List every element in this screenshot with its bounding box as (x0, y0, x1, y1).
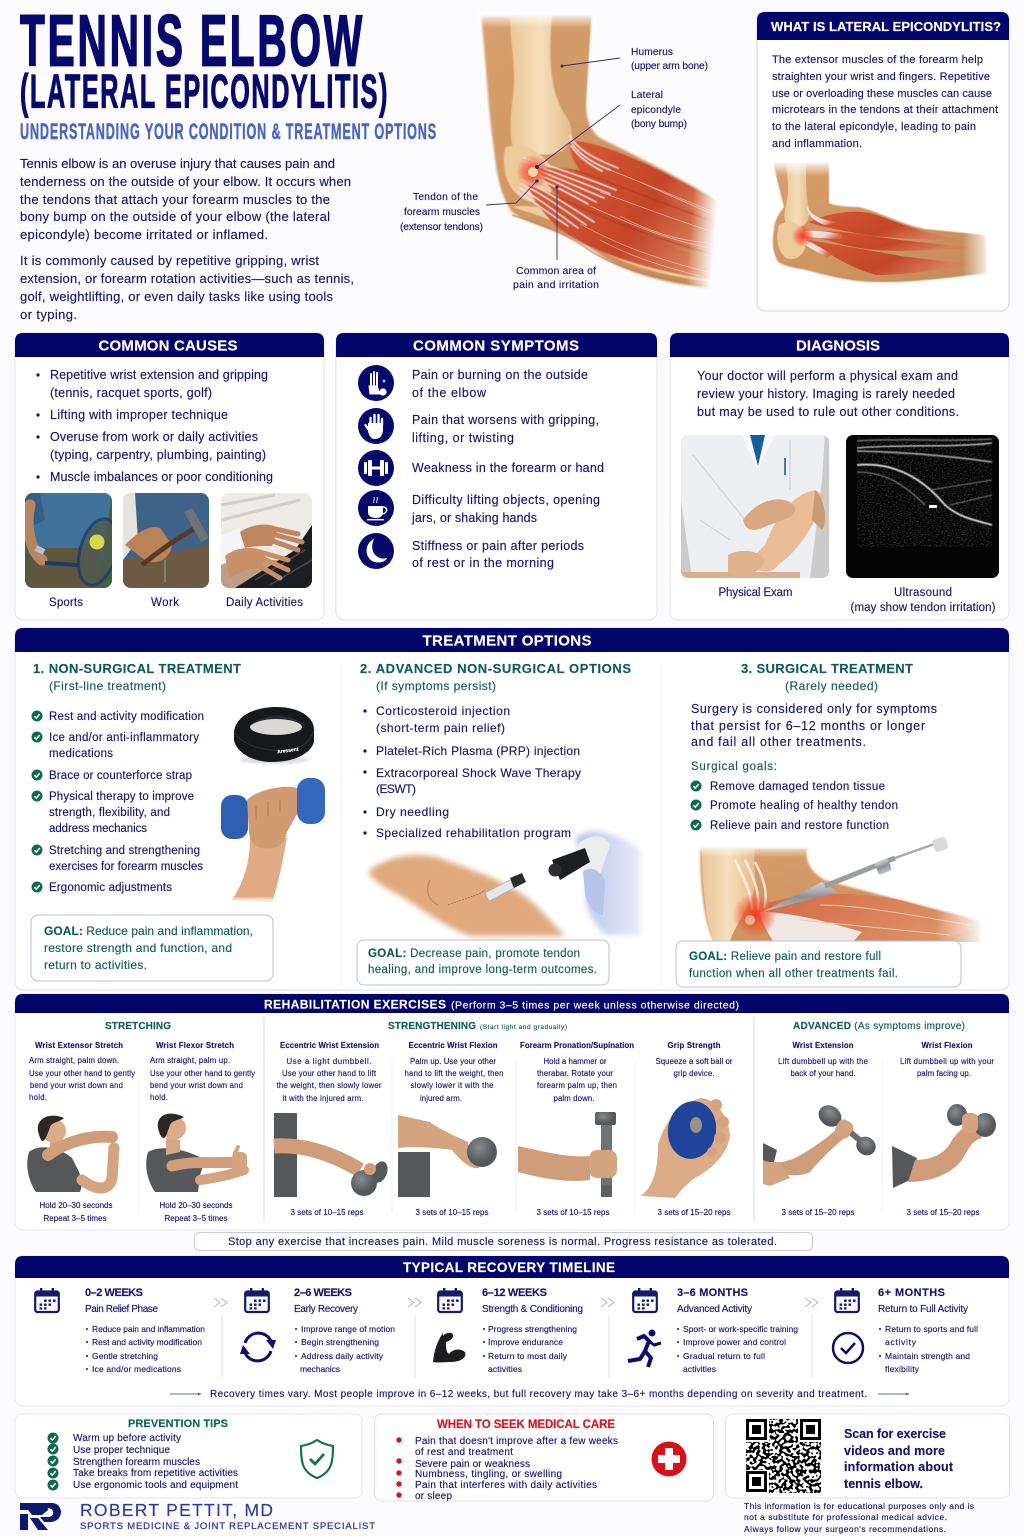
checklist: Stretching and strengthening (49, 845, 200, 857)
icon: flexed bicep (433, 1333, 465, 1362)
column: non-surgical treatment (31, 661, 325, 981)
exercise: wrist flexor stretch: Use your other hand to gently (150, 1069, 255, 1078)
intro paragraph 1: the tendons that attach your forearm muscles to the (20, 192, 330, 207)
exercise: eccentric wrist flexion (398, 1041, 504, 1217)
image: elbow brace (234, 707, 314, 764)
image: surgical elbow with instrument (695, 836, 985, 945)
exercise: eccentric wrist flexion: slowly lower it with the (410, 1081, 494, 1090)
exercise: eccentric wrist extension: it with the injured arm. (282, 1094, 364, 1103)
causes list: Lifting with improper technique (50, 408, 228, 422)
exercise: forearm pronation/supination: Hold a hammer or (544, 1057, 607, 1066)
options list: Platelet-Rich Plasma (PRP) injection (376, 744, 580, 758)
symptoms text (411, 368, 604, 570)
image: shock wave device (548, 831, 640, 935)
icon: calendar (835, 1288, 859, 1312)
image: elbow brace: Aressent (277, 747, 299, 755)
anatomy labels: Humerus (631, 47, 673, 58)
exercise: wrist flexor stretch: hold. (150, 1093, 168, 1102)
photo: work (123, 493, 209, 588)
causes list: Overuse from work or daily activities (50, 430, 258, 444)
phase: 3-6 months: 3–6 MONTHS (677, 1287, 748, 1299)
anatomy labels (400, 47, 708, 233)
QR caption: tennis elbow. (844, 1477, 923, 1491)
column heading: (If symptoms persist) (376, 679, 496, 693)
exercise: forearm pronation/supination: therabar. Rotate your (537, 1069, 613, 1078)
checklist: address mechanics (49, 823, 147, 835)
title: (LATERAL EPICONDYLITIS) (20, 64, 389, 118)
icon: shield (301, 1440, 333, 1478)
body text: The extensor muscles of the forearm help (772, 54, 983, 66)
symptoms text: lifting, or twisting (412, 431, 514, 445)
checklist (32, 710, 204, 894)
diagnosis text: Your doctor will perform a physical exam and (697, 369, 958, 383)
safety note: Stop any exercise that increases pain. Mild muscle soreness is normal. Progress resistance as tolerated. (228, 1236, 777, 1248)
icon: red cross (652, 1442, 686, 1476)
goal callout: restore strength and function, and (44, 941, 232, 955)
phase: 3-6 months (628, 1287, 798, 1374)
heading: (Perform 3–5 times per week unless otherwise directed) (451, 1000, 739, 1012)
pain area label (513, 265, 599, 291)
phase: 6-12 weeks: 6–12 WEEKS (482, 1287, 547, 1299)
disclaimer: not a substitute for professional medical advice. (744, 1512, 947, 1522)
diagnosis text: review your history. Imaging is rarely needed (697, 387, 955, 401)
checklist: exercises for forearm muscles (49, 861, 203, 873)
phase: 6+ months: 6+ MONTHS (878, 1287, 945, 1299)
surgical goals: Relieve pain and restore function (710, 820, 889, 832)
phase: 6-12 weeks: activities (488, 1364, 522, 1374)
phase: 2-6 weeks: mechanics (300, 1364, 340, 1374)
panel: prevention tips (15, 1414, 362, 1498)
phase: 0-2 weeks: 0–2 WEEKS (85, 1287, 143, 1299)
pain area label: Common area of (516, 265, 596, 277)
options list: (ESWT) (376, 782, 416, 796)
phase: 6-12 weeks: Return to most daily (488, 1351, 568, 1361)
exercise: grip strength: Grip Strength (668, 1041, 721, 1050)
exercise: forearm pronation/supination: 3 sets of 10–15 reps (536, 1208, 610, 1217)
intro paragraph 1: epicondyle) become irritated or inflamed. (20, 227, 268, 242)
panel: common symptoms (336, 333, 657, 620)
phase: 6+ months: Return to sports and full (885, 1324, 978, 1334)
checklist: Brace or counterforce strap (49, 770, 192, 782)
exercise: eccentric wrist extension: Eccentric Wrist Extension (280, 1041, 379, 1050)
tips list: Strengthen forearm muscles (73, 1457, 200, 1468)
phase: 3-6 months: activities (683, 1364, 716, 1374)
exercise: wrist flexor stretch: Hold 20–30 seconds (160, 1201, 232, 1210)
heading: REHABILITATION EXERCISES (264, 998, 446, 1012)
symptoms text: Difficulty lifting objects, opening (412, 493, 600, 507)
column: surgical treatment (676, 661, 985, 987)
exercise: wrist extensor stretch (27, 1041, 135, 1223)
column heading: 1. NON-SURGICAL TREATMENT (33, 661, 241, 676)
illustration (146, 1114, 247, 1192)
subtitle: UNDERSTANDING YOUR CONDITION & TREATMENT OPTIONS (20, 119, 437, 144)
body text: microtears in the tendons at their attachment (772, 104, 998, 116)
column heading (33, 661, 241, 693)
options list: Specialized rehabilitation program (376, 826, 571, 840)
phase: 3-6 months: Advanced Activity (677, 1304, 752, 1315)
exercise: wrist extension: 3 sets of 15–20 reps (782, 1208, 854, 1217)
exercise: forearm pronation/supination: palm down. (554, 1094, 594, 1103)
intro paragraph 1: Tennis elbow is an overuse injury that causes pain and (20, 156, 335, 171)
exercise: eccentric wrist flexion: injured arm. (420, 1094, 462, 1103)
symptoms text: of rest or in the morning (412, 556, 554, 570)
icon: burning hand (358, 365, 394, 401)
anatomy labels: forearm muscles (404, 207, 480, 218)
panel: rehabilitation exercises (15, 994, 1009, 1230)
phase: 6+ months: Return to Full Activity (878, 1304, 968, 1315)
phase: 2-6 weeks (240, 1287, 395, 1374)
heading: WHAT IS LATERAL EPICONDYLITIS? (771, 19, 1001, 34)
icon: recovery cycle (240, 1333, 276, 1361)
icon: calendar (35, 1288, 59, 1312)
doctor name (80, 1500, 375, 1532)
phase: 6+ months (833, 1287, 978, 1374)
exercise: wrist flexion: Lift dumbbell up with your (900, 1057, 994, 1066)
panel: when to seek medical care (374, 1414, 714, 1502)
photo: ultrasound (846, 435, 999, 578)
body text: use or overloading these muscles can cause (772, 88, 992, 100)
tips list: Use proper technique (73, 1445, 170, 1456)
warning list: Numbness, tingling, or swelling (415, 1469, 562, 1480)
icon: calendar (245, 1288, 269, 1312)
icon: dumbbell (358, 450, 394, 486)
causes list: (typing, carpentry, plumbing, painting) (50, 448, 266, 462)
checklist: Physical therapy to improve (49, 791, 194, 803)
goal callout: GOAL: Relieve pain and restore full (689, 951, 881, 963)
image: injection into arm (368, 855, 565, 936)
exercise: forearm pronation/supination (518, 1041, 634, 1217)
panel: treatment options (15, 628, 1009, 990)
phase: 2-6 weeks: Address daily activity (301, 1351, 384, 1361)
panel: recovery timeline (15, 1256, 1009, 1406)
symptoms text: jars, or shaking hands (411, 511, 537, 525)
warning list: or sleep (415, 1491, 452, 1502)
group headings: (Start light and gradually) (480, 1024, 567, 1031)
exercise: eccentric wrist flexion: Palm up. Use your other (410, 1057, 496, 1066)
body text: straighten your wrist and fingers. Repetitive (772, 71, 990, 83)
icon: check circle (833, 1333, 863, 1363)
photo labels: (may show tendon irritation) (850, 602, 996, 614)
exercise: eccentric wrist flexion: 3 sets of 10–15 reps (416, 1208, 488, 1217)
photo labels: Work (151, 597, 179, 609)
exercise: eccentric wrist extension: the weight, then slowly lower (276, 1081, 382, 1090)
exercise: eccentric wrist flexion: hand to lift the weight, then (404, 1069, 504, 1078)
exercise: wrist flexion: palm facing up. (917, 1069, 971, 1078)
options list: Dry needling (376, 805, 449, 819)
heading: COMMON CAUSES (98, 338, 238, 354)
phase: 3-6 months: Sport- or work-specific training (683, 1324, 798, 1334)
exercise: wrist flexion: 3 sets of 15–20 reps (906, 1208, 980, 1217)
phase: 0-2 weeks: Gentle stretching (92, 1351, 158, 1361)
intro paragraph 1: tenderness on the outside of your elbow. It occurs when (20, 174, 351, 189)
panel: what is lateral epicondylitis (757, 12, 1009, 311)
exercise: wrist flexor stretch (146, 1041, 255, 1223)
intro paragraph 1: bony bump on the outside of your elbow (the lateral (20, 209, 330, 224)
illustration (398, 1115, 497, 1197)
checklist: Ergonomic adjustments (49, 882, 172, 894)
warning list: Pain that doesn't improve after a few weeks (415, 1436, 618, 1447)
tips list: Take breaks from repetitive activities (73, 1468, 238, 1479)
tips list: Use ergonomic tools and equipment (73, 1480, 238, 1491)
warning list (396, 1436, 618, 1502)
checklist: strength, flexibility, and (49, 807, 170, 819)
diagnosis text (697, 369, 959, 419)
exercise: wrist extension (763, 1041, 879, 1217)
panel: common causes (15, 333, 324, 620)
intro paragraph 2: golf, weightlifting, or even daily tasks like using tools (20, 289, 334, 304)
symptoms text: Weakness in the forearm or hand (412, 461, 604, 475)
QR caption: videos and more (844, 1444, 945, 1458)
anatomy labels: epicondyle (631, 105, 681, 116)
checklist: Rest and activity modification (49, 711, 204, 723)
photo labels (718, 587, 996, 614)
phase: 6-12 weeks (433, 1287, 583, 1374)
illustration (763, 1101, 879, 1186)
illustration (641, 1097, 730, 1198)
intro paragraph 2: extension, or forearm rotation activities—such as tennis, (20, 271, 354, 286)
causes list: (tennis, racquet sports, golf) (50, 386, 212, 400)
QR caption (844, 1427, 954, 1491)
causes list: Repetitive wrist extension and gripping (50, 368, 268, 382)
exercise: wrist flexor stretch: bend your wrist down and (150, 1081, 243, 1090)
heading (264, 998, 739, 1012)
heading: DIAGNOSIS (796, 338, 880, 354)
phase: 2-6 weeks: Early Recovery (294, 1304, 358, 1315)
pain area label: pain and irritation (513, 279, 599, 291)
phase: 0-2 weeks (35, 1287, 205, 1374)
phase: 0-2 weeks: Pain Relief Phase (85, 1304, 158, 1315)
doctor name: SPORTS MEDICINE & JOINT REPLACEMENT SPECIALIST (80, 1521, 375, 1532)
exercise: wrist extensor stretch: Arm straight, palm down. (29, 1056, 119, 1065)
exercise: wrist flexion (892, 1041, 996, 1217)
phase: 6-12 weeks: Improve endurance (488, 1337, 563, 1347)
goal callout: GOAL: Decrease pain, promote tendon (368, 948, 580, 960)
intro paragraph 1 (20, 156, 351, 242)
anatomy labels: (upper arm bone) (631, 61, 708, 72)
small elbow illustration (769, 160, 992, 285)
symptoms text: Pain or burning on the outside (412, 368, 588, 382)
exercise: grip strength: Squeeze a soft ball or (656, 1057, 733, 1066)
heading: COMMON SYMPTOMS (413, 338, 579, 354)
exercise: grip strength (641, 1041, 733, 1217)
column heading: 3. SURGICAL TREATMENT (741, 661, 913, 676)
diagnosis text: but may be used to rule out other conditions. (697, 405, 959, 419)
illustration (274, 1113, 390, 1197)
body text (772, 54, 998, 150)
checklist: Ice and/or anti-inflammatory (49, 732, 199, 744)
surgical goals: Surgical goals: (691, 761, 777, 773)
logo: RP (20, 1503, 61, 1530)
exercise: wrist extension: Wrist Extension (792, 1041, 854, 1050)
icon: calendar (633, 1288, 657, 1312)
exercise: eccentric wrist flexion: Eccentric Wrist Flexion (408, 1041, 498, 1050)
exercise: wrist extension: back of your hand. (790, 1069, 856, 1078)
tips list: Warm up before activity (73, 1433, 181, 1444)
intro paragraph 2: or typing. (20, 307, 77, 322)
photo labels: Ultrasound (894, 587, 952, 599)
phase: 2-6 weeks: Improve range of motion (301, 1324, 395, 1334)
exercise: eccentric wrist extension: Use a light dumbbell. (286, 1057, 372, 1066)
exercise: wrist flexor stretch: Wrist Flexor Stretch (156, 1041, 234, 1050)
goal callout: GOAL: Reduce pain and inflammation, (44, 924, 253, 938)
exercise: grip strength: grip device. (674, 1069, 714, 1078)
goal callout: function when all other treatments fail. (689, 968, 898, 980)
heading: WHEN TO SEEK MEDICAL CARE (437, 1419, 615, 1431)
illustration (518, 1112, 617, 1197)
exercise: eccentric wrist extension: 3 sets of 10–15 reps (290, 1208, 364, 1217)
phase: 6+ months: Maintain strength and (885, 1351, 970, 1361)
causes list: Muscle imbalances or poor conditioning (50, 470, 273, 484)
intro paragraph 2: It is commonly caused by repetitive gripping, wrist (20, 253, 319, 268)
symptoms text: Pain that worsens with gripping, (412, 413, 599, 427)
phase: 6+ months: activity (885, 1337, 917, 1347)
goal callout (31, 915, 273, 981)
disclaimer: Always follow your surgeon's recommendations. (744, 1524, 946, 1534)
group headings: ADVANCED (As symptoms improve) (793, 1021, 965, 1032)
options list: Extracorporeal Shock Wave Therapy (376, 766, 581, 780)
surgical goals (690, 761, 898, 832)
exercise: forearm pronation/supination: forearm palm up, then (537, 1081, 617, 1090)
symptoms text: of the elbow (412, 386, 487, 400)
warning list: Severe pain or weakness (415, 1459, 530, 1470)
QR caption: information about (844, 1460, 954, 1474)
surgical goals: Promote healing of healthy tendon (710, 800, 898, 812)
icon: calendar (438, 1288, 462, 1312)
image: hand with blue dumbbell (221, 778, 325, 906)
exercise: eccentric wrist extension: Use your other hand to lift (282, 1069, 377, 1078)
icon: hand (358, 408, 394, 444)
phase: 3-6 months: Gradual return to full (683, 1351, 765, 1361)
exercise: wrist extensor stretch: Hold 20–30 seconds (40, 1201, 112, 1210)
options list (363, 704, 581, 840)
icon: moon (358, 533, 394, 569)
column heading: 2. ADVANCED NON-SURGICAL OPTIONS (360, 661, 631, 676)
exercise: wrist extension: Lift dumbbell up with the (778, 1057, 868, 1066)
phase: 6+ months: flexibility (885, 1364, 920, 1374)
icon: runner (628, 1330, 661, 1367)
photo: sports (25, 493, 112, 588)
exercise: wrist extensor stretch: hold. (29, 1093, 47, 1102)
checklist: medications (49, 748, 113, 760)
goal callout: healing, and improve long-term outcomes. (368, 964, 597, 976)
exercise: wrist flexor stretch: Arm straight, palm up. (150, 1056, 230, 1065)
photo labels: Physical Exam (718, 587, 792, 599)
symptoms text: Stiffness or pain after periods (412, 539, 584, 553)
surgery description: Surgery is considered only for symptoms (691, 702, 937, 716)
group headings: STRETCHING (105, 1021, 171, 1032)
phase: 2-6 weeks: Begin strengthening (301, 1337, 379, 1347)
heading: TREATMENT OPTIONS (422, 632, 592, 650)
exercise: wrist extensor stretch: Use your other hand to gently (29, 1069, 135, 1078)
exercise: wrist extensor stretch: Wrist Extensor Stretch (35, 1041, 123, 1050)
title (20, 2, 389, 118)
exercise: wrist extensor stretch: Repeat 3–5 times (44, 1214, 106, 1223)
anatomy labels: Tendon of the (413, 192, 478, 203)
phase: 6-12 weeks: Progress strengthening (488, 1324, 577, 1334)
group headings: STRENGTHENING (388, 1021, 476, 1032)
surgery description: and fail all other treatments. (691, 735, 866, 749)
heading: PREVENTION TIPS (128, 1418, 228, 1430)
heading: TYPICAL RECOVERY TIMELINE (403, 1260, 615, 1275)
column: advanced non-surgical options (357, 661, 640, 985)
body text: to the lateral epicondyle, leading to pain (772, 121, 976, 133)
photo labels (49, 597, 303, 609)
warning list: Pain that interferes with daily activities (415, 1480, 597, 1491)
photo: daily activities (221, 493, 312, 588)
column heading: (Rarely needed) (785, 679, 878, 693)
anatomy illustration: elbow (478, 12, 735, 290)
doctor name: ROBERT PETTIT, MD (80, 1500, 273, 1520)
warning list: of rest and treatment (415, 1447, 513, 1458)
recovery note: Recovery times vary. Most people improve in 6–12 weeks, but full recovery may take 3–6+ months depending on severity and treatment. (210, 1389, 867, 1400)
group headings (105, 1021, 965, 1032)
surgery description: that persist for 6–12 months or longer (691, 719, 925, 733)
surgical goals: Remove damaged tendon tissue (710, 781, 885, 793)
anatomy labels: (extensor tendons) (400, 222, 483, 233)
column heading (741, 661, 913, 693)
illustration (27, 1116, 114, 1192)
phase: 6-12 weeks: Strength & Conditioning (482, 1304, 583, 1315)
photo labels: Sports (49, 597, 83, 609)
body text: and inflammation. (772, 138, 862, 150)
exercise: wrist flexion: Wrist Flexion (922, 1041, 973, 1050)
options list: (short-term pain relief) (376, 721, 505, 735)
QR caption: Scan for exercise (844, 1427, 946, 1441)
exercise: wrist flexor stretch: Repeat 3–5 times (164, 1214, 228, 1223)
disclaimer: This information is for educational purposes only and is (744, 1501, 974, 1511)
safety note (194, 1232, 812, 1250)
causes list (36, 368, 273, 484)
phase: 0-2 weeks: Ice and/or medications (92, 1364, 181, 1374)
column heading: (First-line treatment) (49, 679, 166, 693)
goal callout (357, 940, 609, 985)
tips list (48, 1432, 238, 1491)
icon: coffee cup (358, 490, 394, 526)
phase: 3-6 months: Improve power and control (683, 1337, 786, 1347)
illustration (892, 1104, 996, 1188)
exercise: wrist extensor stretch: bend your wrist down and (30, 1081, 123, 1090)
exercise: grip strength: 3 sets of 15–20 reps (658, 1208, 730, 1217)
disclaimer (744, 1501, 974, 1534)
QR code (745, 1418, 822, 1494)
photo labels: Daily Activities (226, 597, 303, 609)
panel: diagnosis (670, 333, 1009, 620)
exercise: forearm pronation/supination: Forearm Pronation/Supination (520, 1041, 634, 1050)
photo: physical exam (681, 435, 829, 578)
options list: Corticosteroid injection (376, 704, 510, 718)
title: TENNIS ELBOW (20, 2, 365, 82)
tendon strands (518, 136, 618, 228)
intro paragraph 2 (20, 253, 354, 322)
phase: 0-2 weeks: Reduce pain and inflammation (92, 1324, 205, 1334)
column heading (360, 661, 631, 693)
phase: 2-6 weeks: 2–6 WEEKS (294, 1287, 352, 1299)
anatomy labels: Lateral (631, 90, 663, 101)
anatomy labels: (bony bump) (631, 119, 687, 130)
exercise: eccentric wrist extension (274, 1041, 390, 1217)
arrows between phases (214, 1298, 818, 1307)
phase: 0-2 weeks: Rest and activity modification (92, 1337, 202, 1347)
goal callout (676, 941, 961, 987)
panel: QR code (726, 1414, 1010, 1498)
surgery description (691, 702, 937, 749)
goal callout: return to activities. (44, 958, 147, 972)
